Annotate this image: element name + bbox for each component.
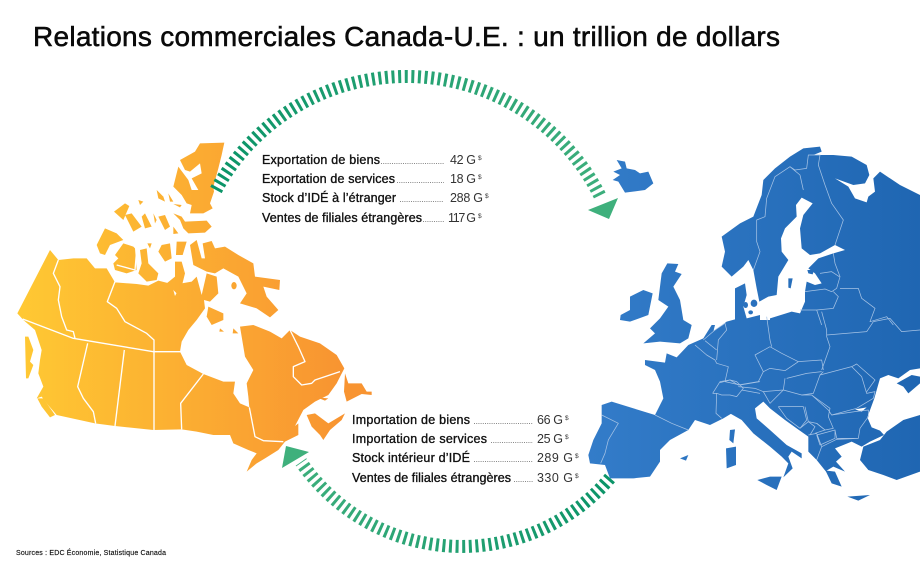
text block: exports: $: [485, 193, 489, 200]
source note: Sources : EDC Économie, Statistique Canada: [16, 548, 166, 557]
Arctic archipelago: [97, 143, 280, 317]
text block: imports: Importation de services: [352, 432, 487, 446]
map: Europe: [588, 147, 920, 501]
text block: exports: $: [478, 174, 482, 181]
text block: exports: 18 G: [450, 172, 476, 186]
text block: imports: 25 G: [537, 432, 563, 446]
text block: exports: [262, 153, 489, 225]
text block: imports: Ventes de filiales étrangères: [352, 471, 511, 485]
text block: imports: $: [575, 453, 579, 460]
national borders: [601, 155, 920, 463]
text block: imports: 289 G: [537, 451, 573, 465]
map: Canada: [17, 143, 372, 472]
arrowhead: exports: [588, 198, 618, 219]
text block: exports: 117 G: [448, 211, 476, 225]
text block: exports: 42 G: [450, 153, 476, 167]
Canada mainland and southern islands: [17, 250, 372, 472]
title: Relations commerciales Canada-U.E. : un trillion de dollars: [33, 21, 780, 52]
text block: imports: 330 G: [537, 471, 573, 485]
text block: exports: Exportation de services: [262, 172, 395, 186]
provincial borders: [23, 250, 340, 442]
arrowhead: imports: [282, 446, 309, 468]
text block: exports: $: [478, 155, 482, 162]
Scandinavia, Baltic and Russia: [722, 147, 920, 325]
text block: imports: Stock intérieur d’IDÉ: [352, 450, 470, 465]
Iceland: [613, 160, 653, 193]
text block: exports: $: [478, 213, 482, 220]
Western Europe and British Isles: [588, 263, 760, 478]
text block: imports: [352, 413, 579, 485]
text block: exports: Exportation de biens: [262, 153, 380, 167]
text block: exports: Stock d’IDÉ à l’étranger: [262, 190, 396, 205]
text block: imports: $: [565, 415, 569, 422]
arrow: imports arc: [282, 446, 610, 546]
text block: imports: $: [575, 473, 579, 480]
arrow: exports arc: [216, 76, 618, 219]
text block: imports: 66 G: [537, 413, 563, 427]
text block: imports: $: [565, 434, 569, 441]
text block: exports: 288 G: [450, 191, 483, 205]
Central Europe, Italy, Balkans and Turkey: [720, 320, 920, 501]
text block: exports: Ventes de filiales étrangères: [262, 211, 422, 225]
text block: imports: Importation de biens: [352, 413, 470, 427]
